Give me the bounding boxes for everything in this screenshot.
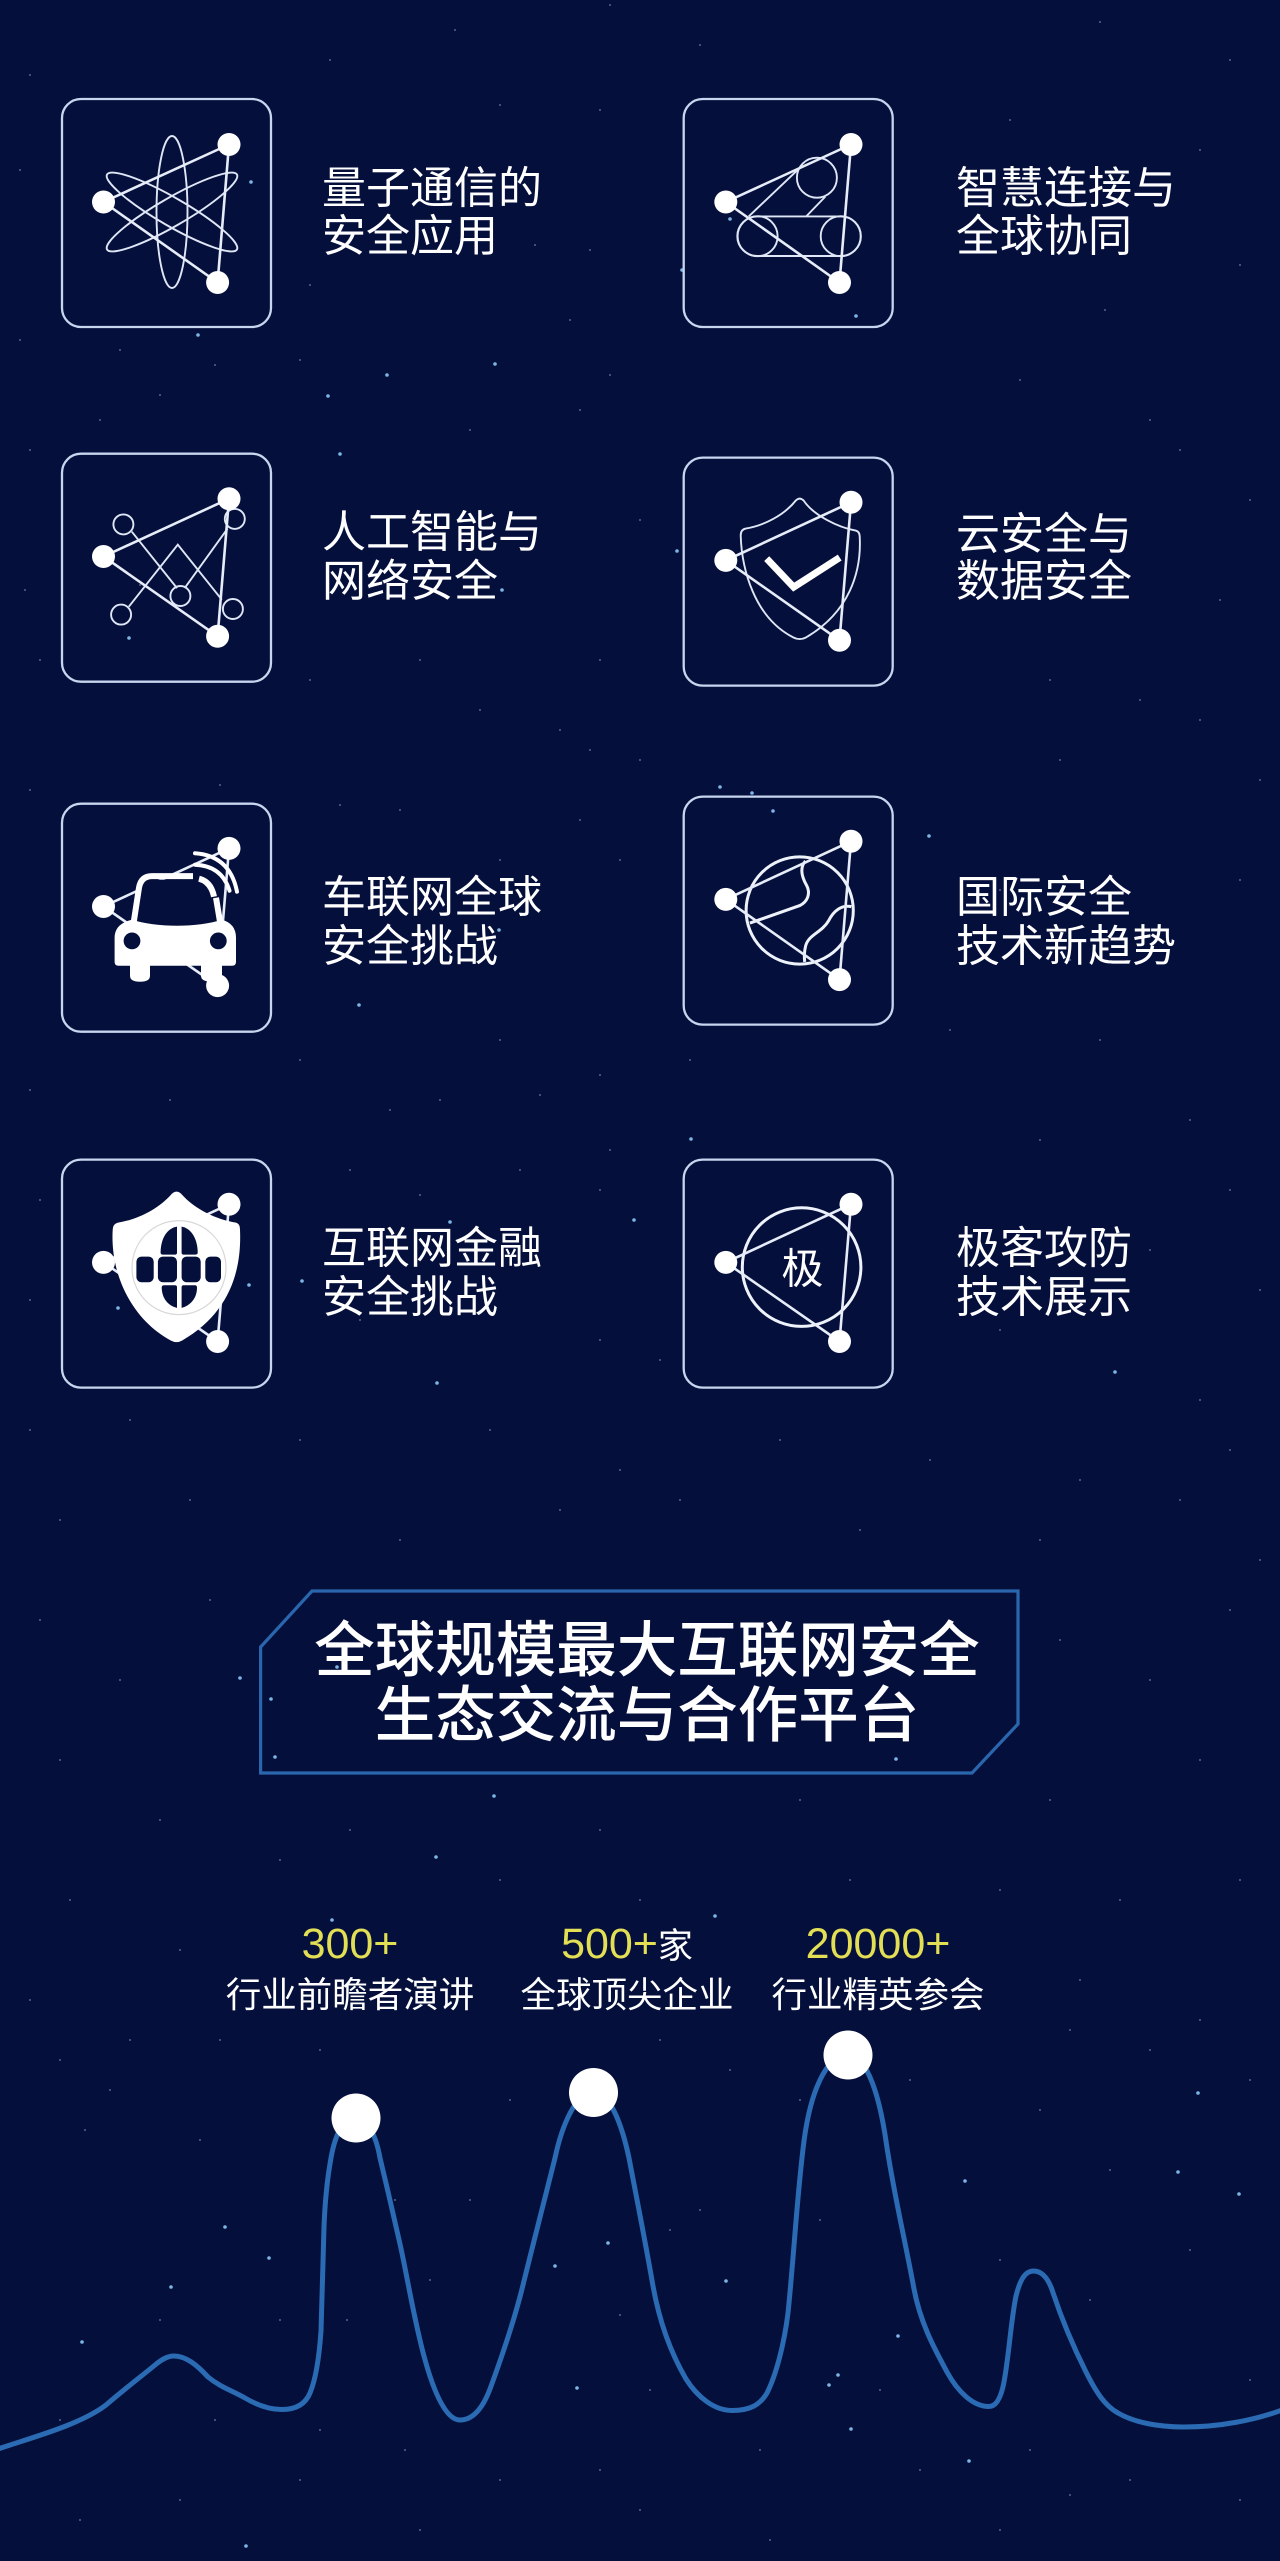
- shield outline: [741, 499, 860, 639]
- circle with character: 极: [781, 1246, 823, 1293]
- label: geek contest: 极客攻防: [956, 1224, 1132, 1273]
- check mark: [767, 558, 840, 587]
- icon panel: geek contest: [684, 1160, 893, 1388]
- stat: speakers: 300+: [302, 1920, 398, 1968]
- belt pulleys: [737, 158, 861, 256]
- peak line chart: [0, 2030, 1280, 2449]
- label: connected cars: 安全挑战: [322, 922, 498, 971]
- network triangle: [92, 133, 240, 294]
- node graph: [111, 509, 245, 625]
- network triangle: [92, 837, 240, 997]
- banner heading: 生态交流与合作平台: [375, 1681, 919, 1749]
- network triangle: [714, 830, 862, 991]
- label: smart connection: 智慧连接与: [956, 164, 1176, 213]
- stat: companies: [520, 1920, 734, 2015]
- label: cloud and data security: 数据安全: [956, 557, 1132, 606]
- stat: attendees: 20000+: [806, 1920, 950, 1968]
- icon panel: smart connection: [684, 99, 893, 327]
- network triangle: [92, 1193, 240, 1353]
- label: smart connection: 全球协同: [956, 212, 1132, 261]
- label: quantum communication: 量子通信的: [322, 164, 542, 213]
- banner heading: 全球规模最大互联网安全: [314, 1616, 980, 1684]
- label: connected cars: 车联网全球: [322, 873, 542, 922]
- atom ellipses: [100, 136, 244, 288]
- globe: [746, 857, 853, 964]
- label: AI and network security: 人工智能与: [322, 508, 542, 557]
- icon panel: connected cars: [62, 804, 271, 1032]
- icon panel: cloud and data security: [684, 458, 893, 686]
- icon panel: quantum communication: [62, 99, 271, 327]
- label: AI and network security: 网络安全: [322, 557, 498, 606]
- label: cloud and data security: 云安全与: [956, 510, 1132, 559]
- icon panel: internet finance: [62, 1160, 271, 1388]
- network triangle: [92, 487, 240, 648]
- filled shield with globe: [112, 1192, 240, 1342]
- circle with character: [742, 1208, 861, 1326]
- icon panel: global security trends: [684, 797, 893, 1025]
- peak markers: [332, 2030, 872, 2142]
- network triangle: [714, 491, 862, 652]
- car: [115, 853, 237, 982]
- icon panel: AI and network security: [62, 454, 271, 682]
- stat: companies: 全球顶尖企业: [520, 1975, 734, 2015]
- stat: companies: 500+家: [561, 1920, 693, 1968]
- stat: attendees: [771, 1920, 985, 2015]
- label: geek contest: 技术展示: [956, 1273, 1132, 1322]
- network triangle: [714, 133, 862, 294]
- banner heading: [261, 1591, 1018, 1773]
- stat: speakers: [226, 1920, 474, 2015]
- label: internet finance: 互联网金融: [322, 1224, 542, 1273]
- label: quantum communication: 安全应用: [322, 212, 498, 261]
- stat: attendees: 行业精英参会: [771, 1975, 985, 2015]
- label: global security trends: 国际安全: [956, 873, 1132, 922]
- label: global security trends: 技术新趋势: [956, 922, 1176, 971]
- stat: speakers: 行业前瞻者演讲: [226, 1975, 474, 2015]
- label: internet finance: 安全挑战: [322, 1273, 498, 1322]
- network triangle: [714, 1193, 862, 1353]
